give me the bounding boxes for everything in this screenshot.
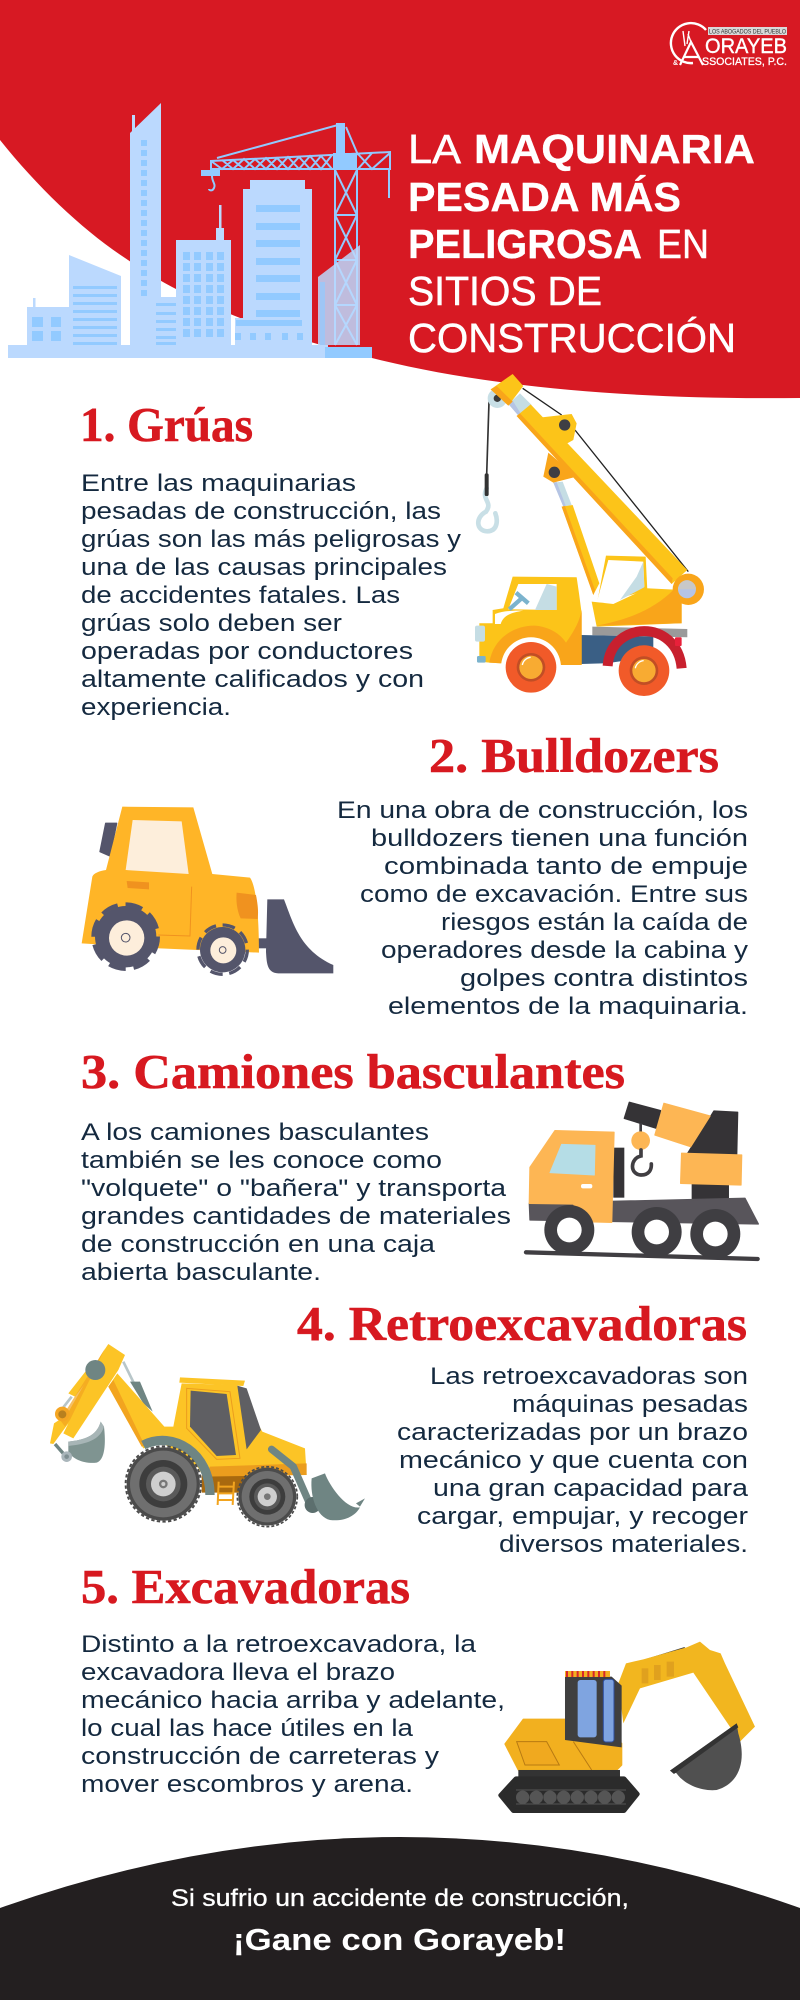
text block: camiones: abierta basculante.: [81, 1259, 321, 1286]
title: LA: [408, 126, 462, 172]
text block: retroexcavadoras: Las retroexcavadoras son: [430, 1363, 748, 1390]
heading: 3. Camiones basculantes: 3. Camiones basculantes: [81, 1044, 625, 1099]
icon: crane truck: [475, 374, 704, 697]
heading: 4. Retroexcavadoras: 4. Retroexcavadoras: [297, 1296, 747, 1351]
text block: grúas: experiencia.: [81, 694, 231, 721]
text block: camiones: de construcción en una caja: [81, 1231, 435, 1258]
text block: bulldozers: golpes contra distintos: [460, 965, 748, 992]
text block: grúas: grúas solo deben ser: [81, 610, 342, 637]
text block: retroexcavadoras: caracterizadas por un brazo: [397, 1419, 748, 1446]
title: CONSTRUCCIÓN: [408, 315, 736, 361]
text block: bulldozers: riesgos están la caída de: [441, 909, 748, 936]
text block: bulldozers: En una obra de construcción, los: [337, 797, 748, 824]
text block: grúas: Entre las maquinarias: [81, 470, 356, 497]
illustration: city skyline with tower crane: [8, 103, 390, 358]
heading: 1. Grúas: 1. Grúas: [80, 397, 253, 452]
title: PESADA MÁS: [408, 174, 681, 220]
text block: retroexcavadoras: diversos materiales.: [499, 1531, 748, 1558]
icon: backhoe loader: [50, 1344, 365, 1527]
text block: grúas: altamente calificados y con: [81, 666, 424, 693]
text block: retroexcavadoras: máquinas pesadas: [512, 1391, 748, 1418]
text block: excavadoras: mecánico hacia arriba y adelante,: [81, 1687, 505, 1714]
title: EN: [657, 221, 709, 267]
section 4: Retroexcavadoras: [50, 1296, 748, 1558]
text block: bulldozers: elementos de la maquinaria.: [388, 993, 748, 1020]
section 1: Grúas: [80, 374, 704, 721]
title: SITIOS DE: [408, 268, 602, 314]
header red background: [0, 0, 800, 398]
text block: bulldozers: combinada tanto de empuje: [384, 853, 748, 880]
text block: camiones: A los camiones basculantes: [81, 1119, 429, 1146]
text block: bulldozers: como de excavación. Entre sus: [360, 881, 748, 908]
icon: excavator: [501, 1642, 755, 1811]
footer text: call to action: ¡Gane con Gorayeb!: [233, 1922, 566, 1957]
logo: Gorayeb & Associates: SSOCIATES, P.C.: [702, 56, 787, 68]
logo: Gorayeb & Associates: ORAYEB: [705, 35, 787, 58]
title: [408, 126, 755, 361]
text block: grúas: una de las causas principales: [81, 554, 447, 581]
icon: dump truck: [526, 1102, 758, 1259]
text block: camiones: también se les conoce como: [81, 1147, 442, 1174]
text block: retroexcavadoras: cargar, empujar, y recoger: [417, 1503, 748, 1530]
footer text: accident line: Si sufrio un accidente de construcción,: [171, 1885, 629, 1912]
text block: grúas: operadas por conductores: [81, 638, 413, 665]
text block: bulldozers: bulldozers tienen una función: [371, 825, 748, 852]
text block: camiones: [81, 1119, 511, 1286]
text block: retroexcavadoras: mecánico y que cuenta con: [399, 1447, 748, 1474]
text block: grúas: de accidentes fatales. Las: [81, 582, 400, 609]
text block: excavadoras: [81, 1631, 505, 1798]
text block: excavadoras: excavadora lleva el brazo: [81, 1659, 395, 1686]
heading: 2. Bulldozers: 2. Bulldozers: [429, 728, 719, 783]
text block: grúas: pesadas de construcción, las: [81, 498, 441, 525]
text block: excavadoras: Distinto a la retroexcavadora, la: [81, 1631, 476, 1658]
title: MAQUINARIA: [474, 126, 755, 172]
text block: excavadoras: lo cual las hace útiles en la: [81, 1715, 413, 1742]
section 5: Excavadoras: [81, 1559, 755, 1811]
text block: retroexcavadoras: [397, 1363, 748, 1558]
title: PELIGROSA: [408, 221, 642, 267]
text block: bulldozers: operadores desde la cabina y: [381, 937, 749, 964]
text block: grúas: [81, 470, 462, 721]
section 3: Camiones basculantes: [81, 1044, 758, 1286]
text block: excavadoras: mover escombros y arena.: [81, 1771, 413, 1798]
text block: retroexcavadoras: una gran capacidad para: [433, 1475, 748, 1502]
text block: excavadoras: construcción de carreteras y: [81, 1743, 440, 1770]
icon: bulldozer: [82, 807, 333, 974]
logo: Gorayeb & Associates: &: [673, 60, 678, 67]
text block: camiones: "volquete" o "bañera" y transporta: [81, 1175, 506, 1202]
section 2: Bulldozers: [82, 728, 749, 1020]
text block: camiones: grandes cantidades de materiales: [81, 1203, 511, 1230]
footer band: [0, 1837, 800, 2000]
text block: bulldozers: [337, 797, 749, 1020]
heading: 5. Excavadoras: 5. Excavadoras: [81, 1559, 410, 1614]
logo: Gorayeb & Associates: [671, 23, 787, 68]
text block: grúas: grúas son las más peligrosas y: [81, 526, 462, 553]
